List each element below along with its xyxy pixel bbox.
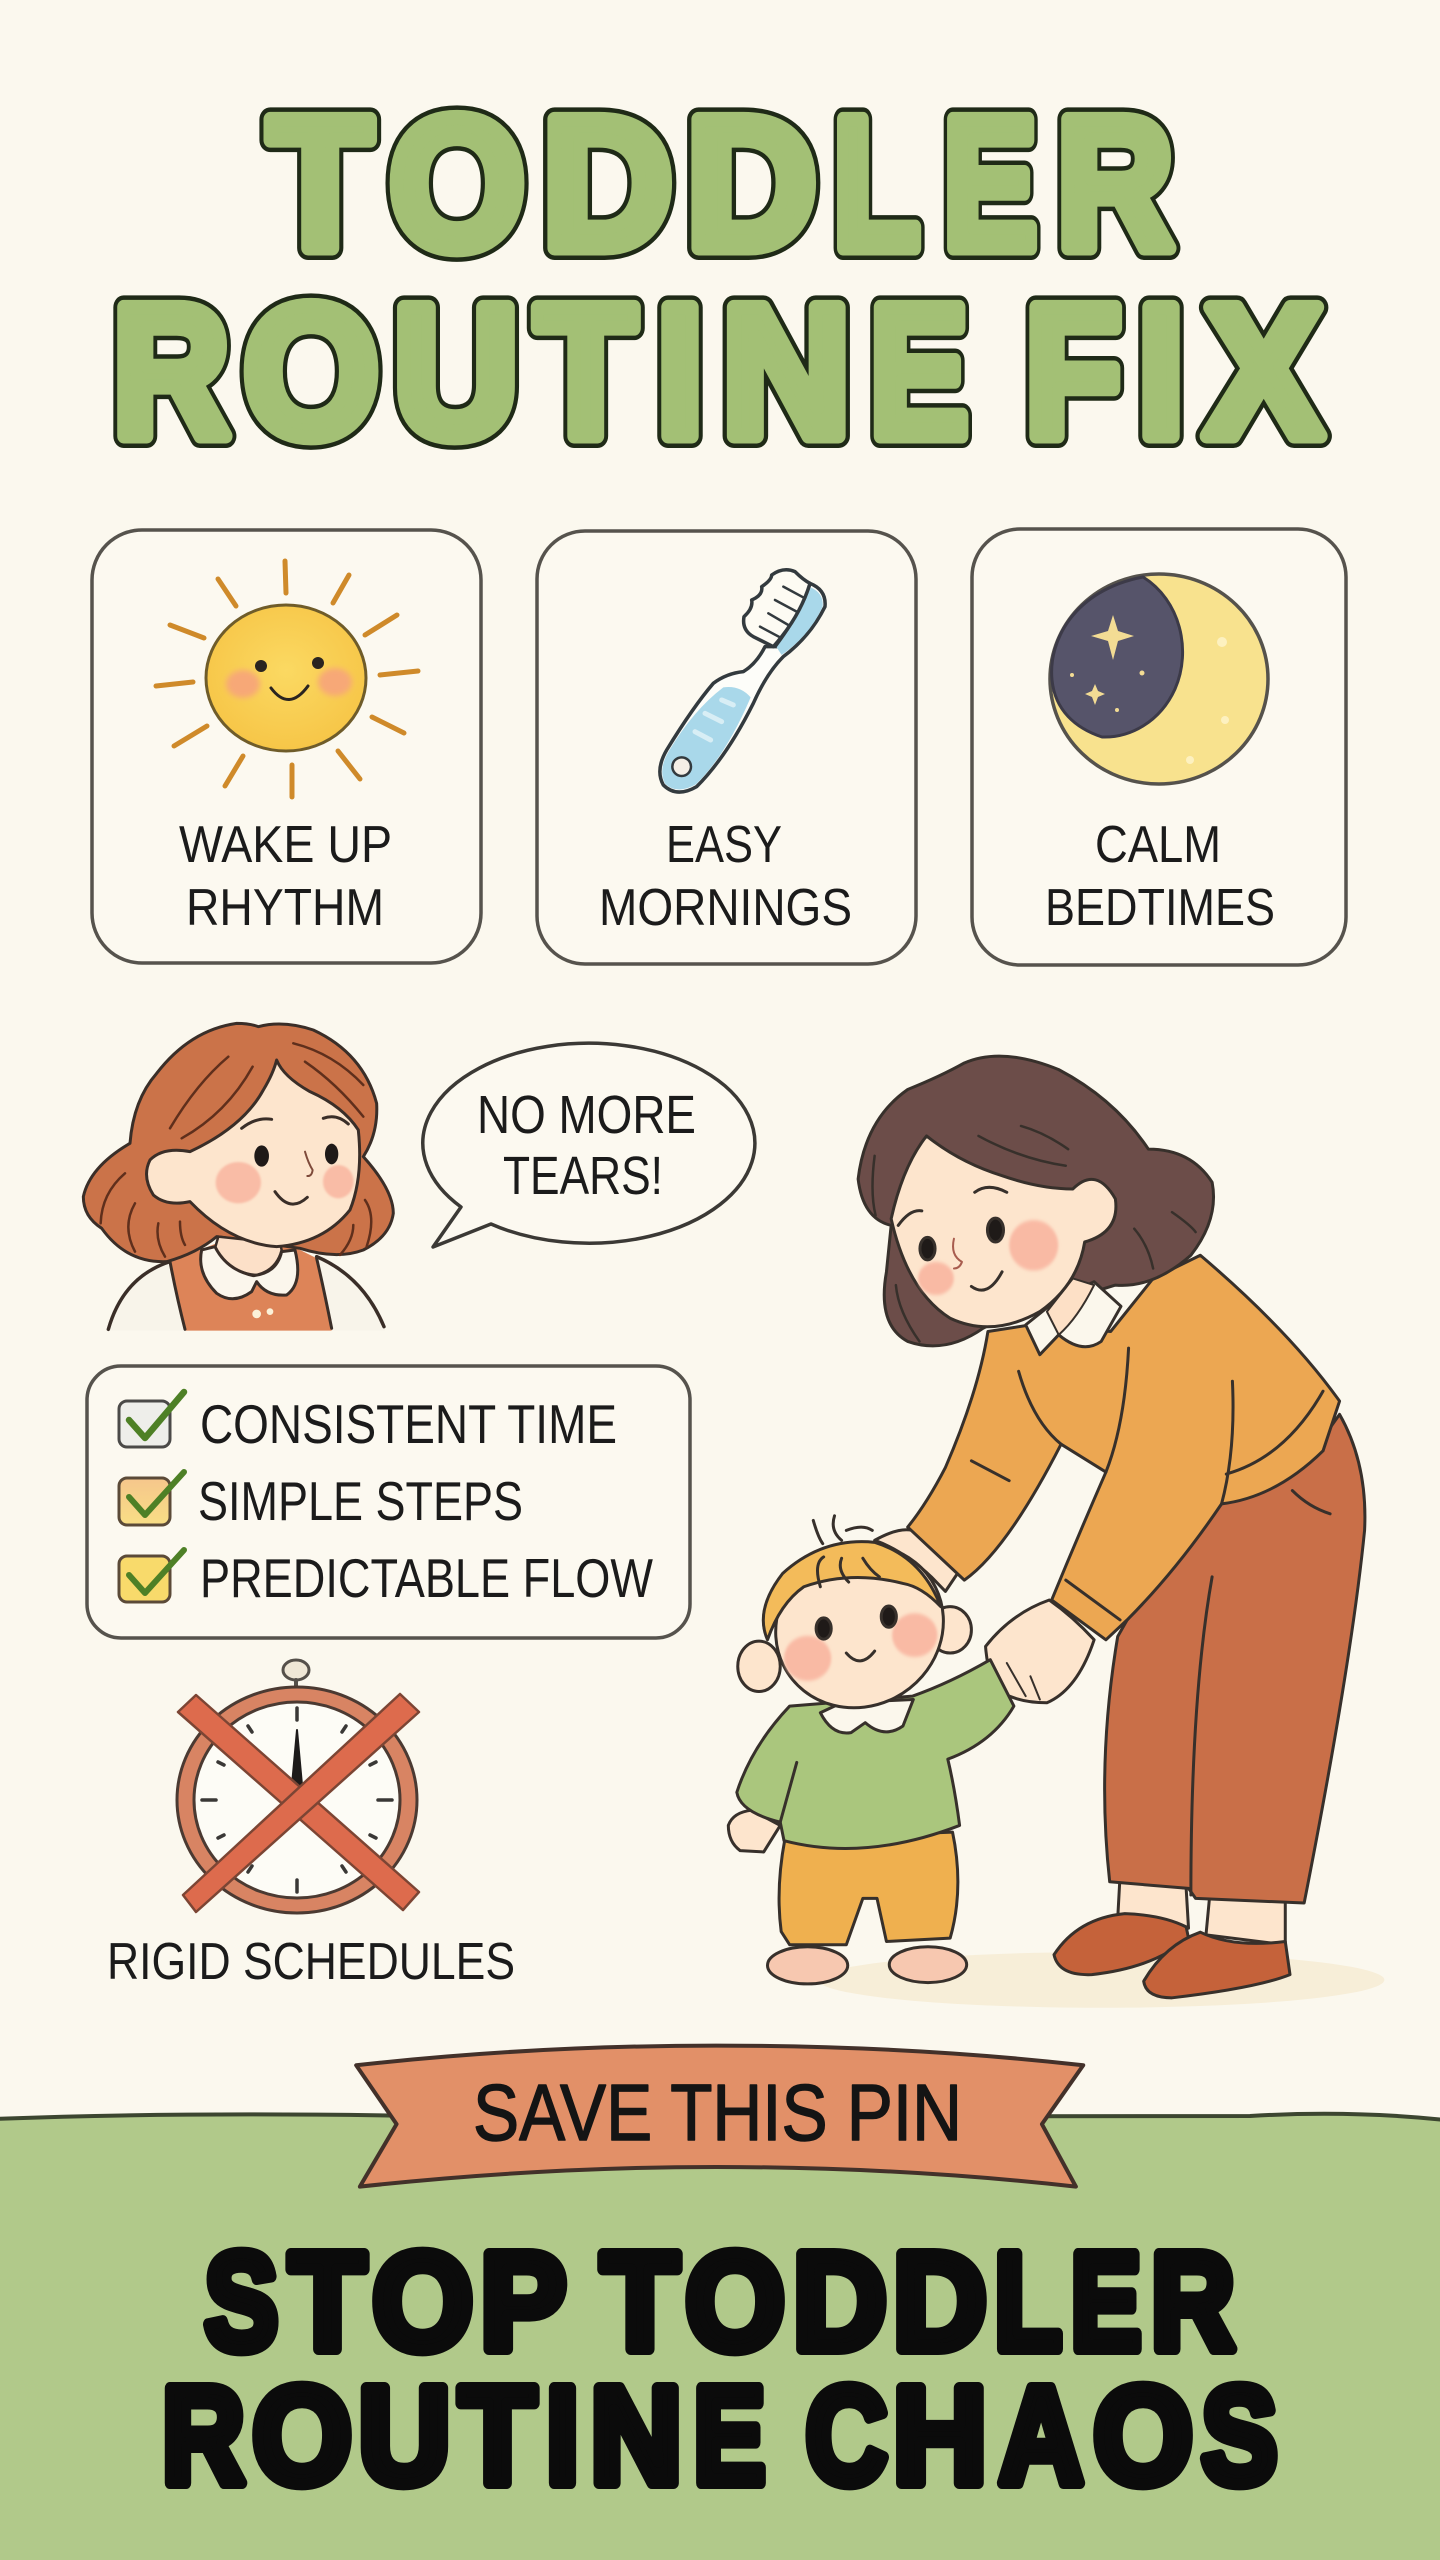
bottom headline: C (806, 2359, 887, 2513)
bottom headline: L (994, 2225, 1062, 2379)
bottom headline: D (893, 2225, 987, 2379)
toddler (728, 1516, 1014, 1984)
label: calm bedtimes: BEDTIMES (1045, 879, 1275, 937)
title: D (687, 79, 816, 288)
bottom headline: R (1151, 2225, 1235, 2379)
title: X (1205, 267, 1322, 476)
bottom headline: R (162, 2359, 245, 2513)
bottom headline: T (601, 2225, 679, 2379)
panel: calm bedtimes (972, 529, 1346, 965)
check item: simple steps: SIMPLE STEPS (198, 1470, 523, 1532)
title: T (536, 267, 636, 476)
title: R (113, 267, 229, 476)
label: wake up rhythm: WAKE UP (179, 816, 392, 874)
title: U (394, 267, 518, 476)
title: X (1205, 267, 1322, 476)
bottom headline: O (372, 2225, 473, 2379)
green hill footer (0, 2114, 1440, 2560)
title: U (394, 267, 518, 476)
icon: sun (156, 561, 418, 797)
title: D (687, 79, 816, 288)
bottom headline: H (893, 2359, 987, 2513)
title: T (268, 79, 372, 288)
title: E (870, 267, 968, 476)
title: R (1057, 79, 1173, 288)
label: easy mornings: MORNINGS (599, 879, 852, 937)
bottom headline: T (289, 2225, 366, 2379)
illustration: girl portrait (83, 1023, 393, 1331)
ground shadow (818, 1952, 1384, 2008)
label: wake up rhythm: RHYTHM (186, 879, 384, 937)
title: D (543, 79, 672, 288)
title: O (244, 267, 379, 476)
bottom headline: D (793, 2225, 887, 2379)
label: calm bedtimes: CALM (1095, 816, 1221, 874)
label: easy mornings: EASY (666, 816, 782, 874)
title: T (268, 79, 372, 288)
title: F (1025, 267, 1122, 476)
speech text: NO MORE (477, 1085, 696, 1145)
bottom headline: I (546, 2359, 579, 2513)
speech text (477, 1085, 696, 1206)
title: D (543, 79, 672, 288)
bottom headline (162, 2225, 1277, 2513)
ribbon: save this pin: SAVE THIS PIN (473, 2068, 962, 2157)
mother (858, 1056, 1365, 1998)
title: O (244, 267, 379, 476)
speech text: TEARS! (503, 1146, 663, 1206)
title: E (943, 79, 1037, 288)
check item: simple steps (119, 1470, 523, 1532)
check item: consistent time: CONSISTENT TIME (200, 1393, 617, 1455)
label: calm bedtimes (1045, 816, 1275, 937)
title: R (113, 267, 229, 476)
icon: moon (1050, 574, 1268, 784)
title: R (1057, 79, 1173, 288)
title: I (657, 267, 703, 476)
panel: checklist (87, 1366, 690, 1638)
bottom headline: O (252, 2359, 352, 2513)
title: O (390, 79, 525, 288)
title: I (657, 267, 703, 476)
bottom headline: E (694, 2359, 765, 2513)
title: N (722, 267, 850, 476)
title: F (1025, 267, 1122, 476)
bottom headline: S (1202, 2359, 1277, 2513)
title: E (870, 267, 968, 476)
title: T (536, 267, 636, 476)
title: O (390, 79, 525, 288)
icon: toothbrush (660, 570, 825, 792)
bottom headline: U (359, 2359, 450, 2513)
panel: wake up rhythm (92, 530, 481, 963)
bottom headline: P (480, 2225, 564, 2379)
label: easy mornings (599, 816, 852, 937)
title: I (1138, 267, 1184, 476)
bottom headline: A (999, 2359, 1083, 2513)
title: L (833, 79, 920, 288)
title: L (833, 79, 920, 288)
icon: crossed-out clock (177, 1660, 419, 1913)
label: rigid schedules: RIGID SCHEDULES (107, 1933, 515, 1991)
bottom headline: O (1094, 2359, 1193, 2513)
title (113, 79, 1322, 476)
title: E (943, 79, 1037, 288)
title: N (722, 267, 850, 476)
ribbon: save this pin (356, 2046, 1083, 2187)
bottom headline: E (1071, 2225, 1141, 2379)
title: I (1138, 267, 1184, 476)
label: wake up rhythm (179, 816, 392, 937)
bottom headline: T (459, 2359, 536, 2513)
speech bubble (423, 1043, 755, 1247)
bottom headline: O (686, 2225, 785, 2379)
illustration: mother and toddler (728, 1056, 1384, 2008)
bottom headline: S (205, 2225, 278, 2379)
bottom headline: N (590, 2359, 682, 2513)
panel: easy mornings (537, 531, 916, 964)
check item: predictable flow: PREDICTABLE FLOW (200, 1547, 653, 1609)
